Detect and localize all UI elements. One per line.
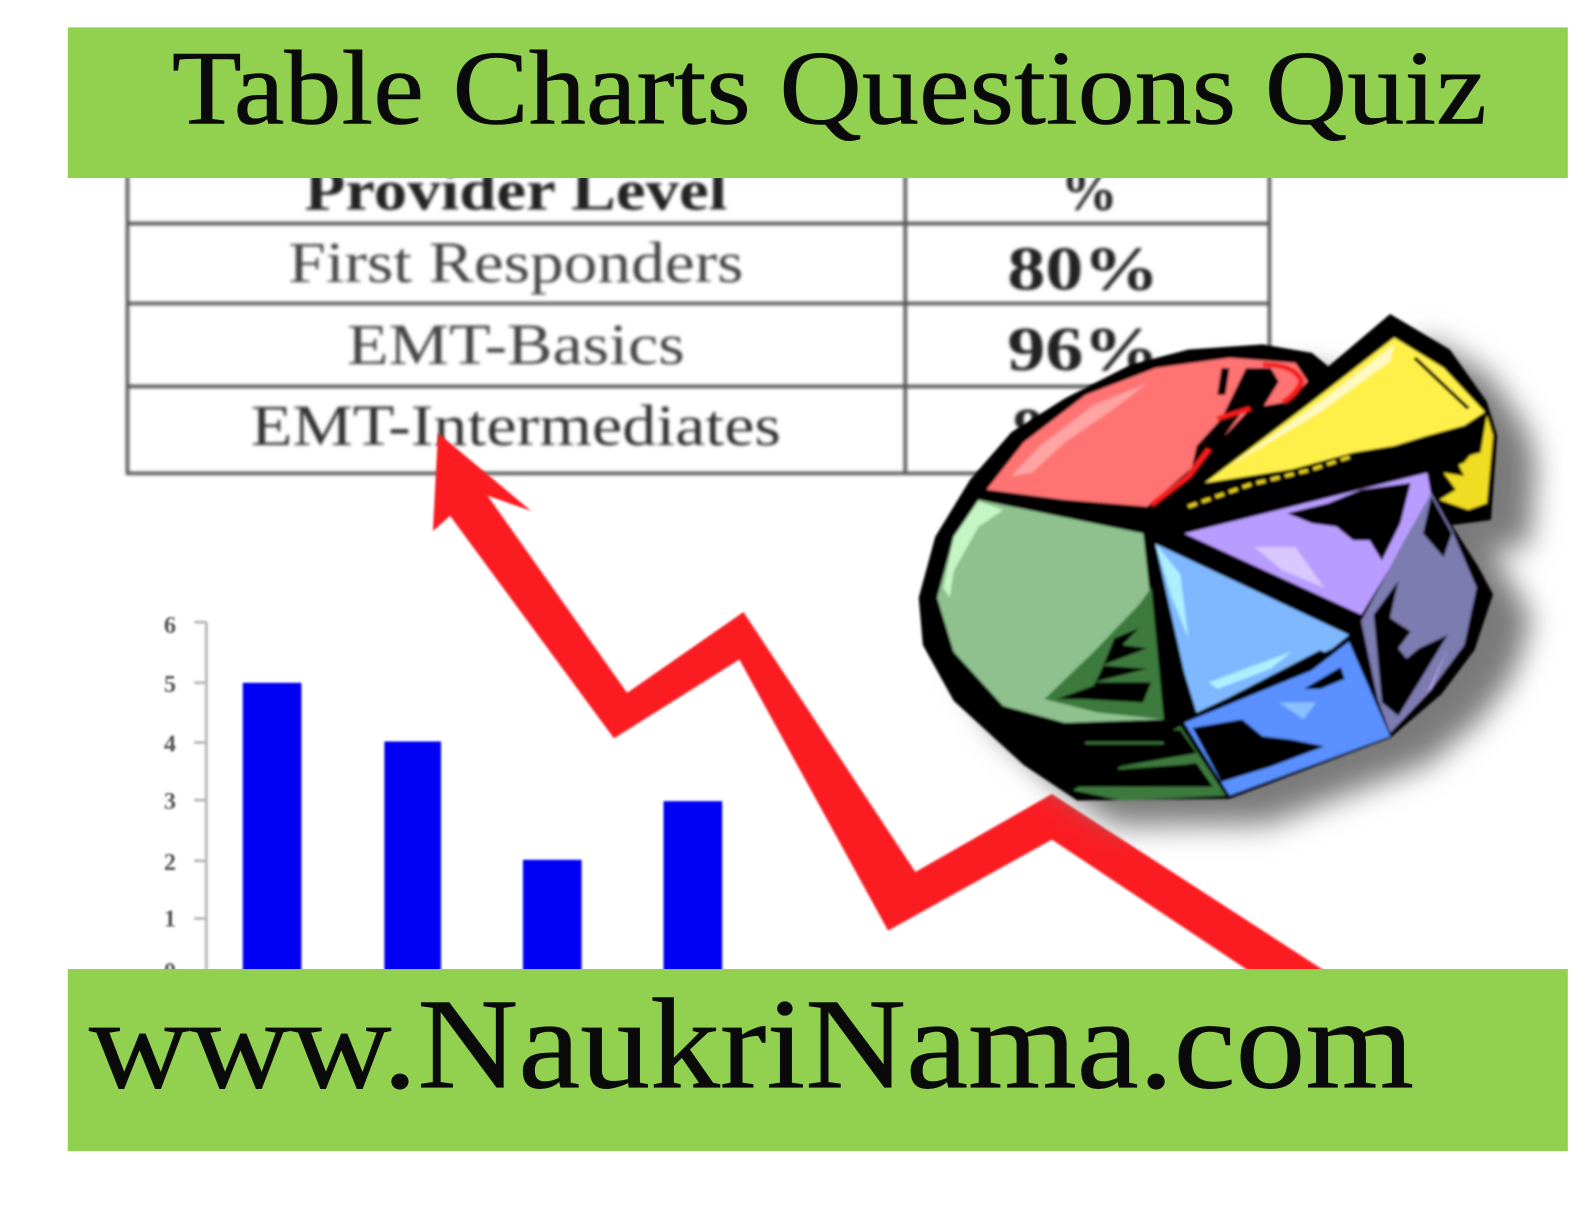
slice: yellow — [1205, 338, 1485, 483]
y axis labels: 5 — [164, 671, 176, 698]
value: 80%: 80% — [1007, 233, 1159, 303]
y axis — [194, 622, 206, 971]
pie outline — [919, 314, 1497, 800]
y axis labels — [164, 612, 176, 985]
slice: slate side — [1361, 493, 1477, 733]
bar chart — [164, 612, 722, 985]
title: Table Charts Questions Quiz — [172, 28, 1487, 146]
slice: blue side — [1184, 642, 1390, 795]
y axis labels: 2 — [164, 849, 176, 876]
table header: percent: % — [1061, 160, 1118, 222]
pie chart illustration — [919, 314, 1536, 826]
y axis labels: 4 — [164, 731, 176, 758]
top banner — [68, 27, 1568, 178]
slice: red — [987, 358, 1308, 507]
red zigzag arrow — [433, 433, 1325, 971]
row: first responders: First Responders — [288, 230, 743, 295]
slice: purple — [1184, 473, 1431, 615]
value: partly hidden: 8 — [1012, 395, 1043, 465]
pie shadow — [958, 339, 1536, 826]
slice: blue — [1155, 544, 1349, 713]
slice: green base — [1073, 726, 1225, 800]
value: 96%: 96% — [1007, 314, 1159, 384]
row: EMT-Basics: EMT-Basics — [347, 312, 685, 377]
y axis labels: 6 — [164, 612, 176, 639]
row: EMT-Intermediates: EMT-Intermediates — [251, 393, 781, 458]
slice: green — [937, 500, 1164, 723]
data table — [127, 160, 1269, 473]
y axis labels: 3 — [164, 788, 176, 815]
bars — [243, 683, 722, 976]
bottom banner — [68, 969, 1568, 1151]
table header: provider level: Provider Level — [304, 160, 727, 222]
website url: www.NaukriNama.com — [89, 973, 1414, 1116]
y axis labels: 1 — [164, 906, 176, 933]
y axis labels: 0 — [164, 958, 176, 985]
